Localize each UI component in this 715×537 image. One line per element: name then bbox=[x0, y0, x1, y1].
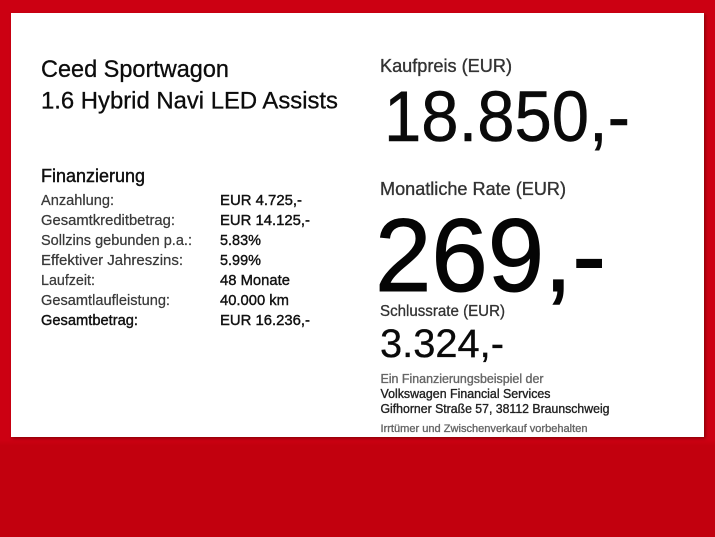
financing labels: Sollzins gebunden p.a.: bbox=[41, 232, 192, 249]
financing values: 40.000 km bbox=[220, 292, 289, 309]
financing example note: Gifhorner Straße 57, 38112 Braunschweig bbox=[380, 402, 610, 416]
price: 18.850: 18.850,- bbox=[384, 78, 630, 157]
heading: Finanzierung: Finanzierung bbox=[41, 165, 145, 186]
financing labels bbox=[41, 192, 192, 329]
financing values: 5.99% bbox=[220, 252, 261, 269]
financing example note bbox=[380, 372, 610, 416]
title: 1.6 Hybrid Navi LED Assists bbox=[41, 88, 338, 114]
label: Kaufpreis: Kaufpreis (EUR) bbox=[380, 56, 512, 76]
white card panel bbox=[11, 13, 704, 437]
financing values: 5.83% bbox=[220, 232, 261, 249]
financing labels: Effektiver Jahreszins: bbox=[41, 252, 183, 269]
final rate: 3.324: 3.324,- bbox=[380, 322, 504, 366]
monthly rate: 269: 269,- bbox=[375, 198, 606, 314]
financing values: 48 Monate bbox=[220, 272, 290, 289]
label: Schlussrate: Schlussrate (EUR) bbox=[380, 303, 505, 320]
financing labels: Gesamtlaufleistung: bbox=[41, 292, 170, 309]
financing labels: Anzahlung: bbox=[41, 192, 114, 209]
financing example note: Ein Finanzierungsbeispiel der bbox=[380, 372, 544, 386]
panel: financing details bbox=[41, 165, 310, 329]
label: Monatliche Rate: Monatliche Rate (EUR) bbox=[380, 179, 566, 199]
title bbox=[41, 56, 338, 114]
financing values: EUR 14.125,- bbox=[220, 212, 310, 229]
financing labels: Gesamtkreditbetrag: bbox=[41, 212, 175, 229]
financing values: EUR 16.236,- bbox=[220, 312, 310, 329]
financing labels: Laufzeit: bbox=[41, 272, 95, 289]
title: Ceed Sportwagon bbox=[41, 56, 229, 83]
financing labels: Gesamtbetrag: bbox=[41, 312, 138, 329]
financing example note: Volkswagen Financial Services bbox=[380, 387, 550, 401]
financing values: EUR 4.725,- bbox=[220, 192, 302, 209]
disclaimer: Irrtümer und Zwischenverkauf vorbehalten bbox=[380, 423, 588, 435]
financing values bbox=[220, 192, 310, 329]
